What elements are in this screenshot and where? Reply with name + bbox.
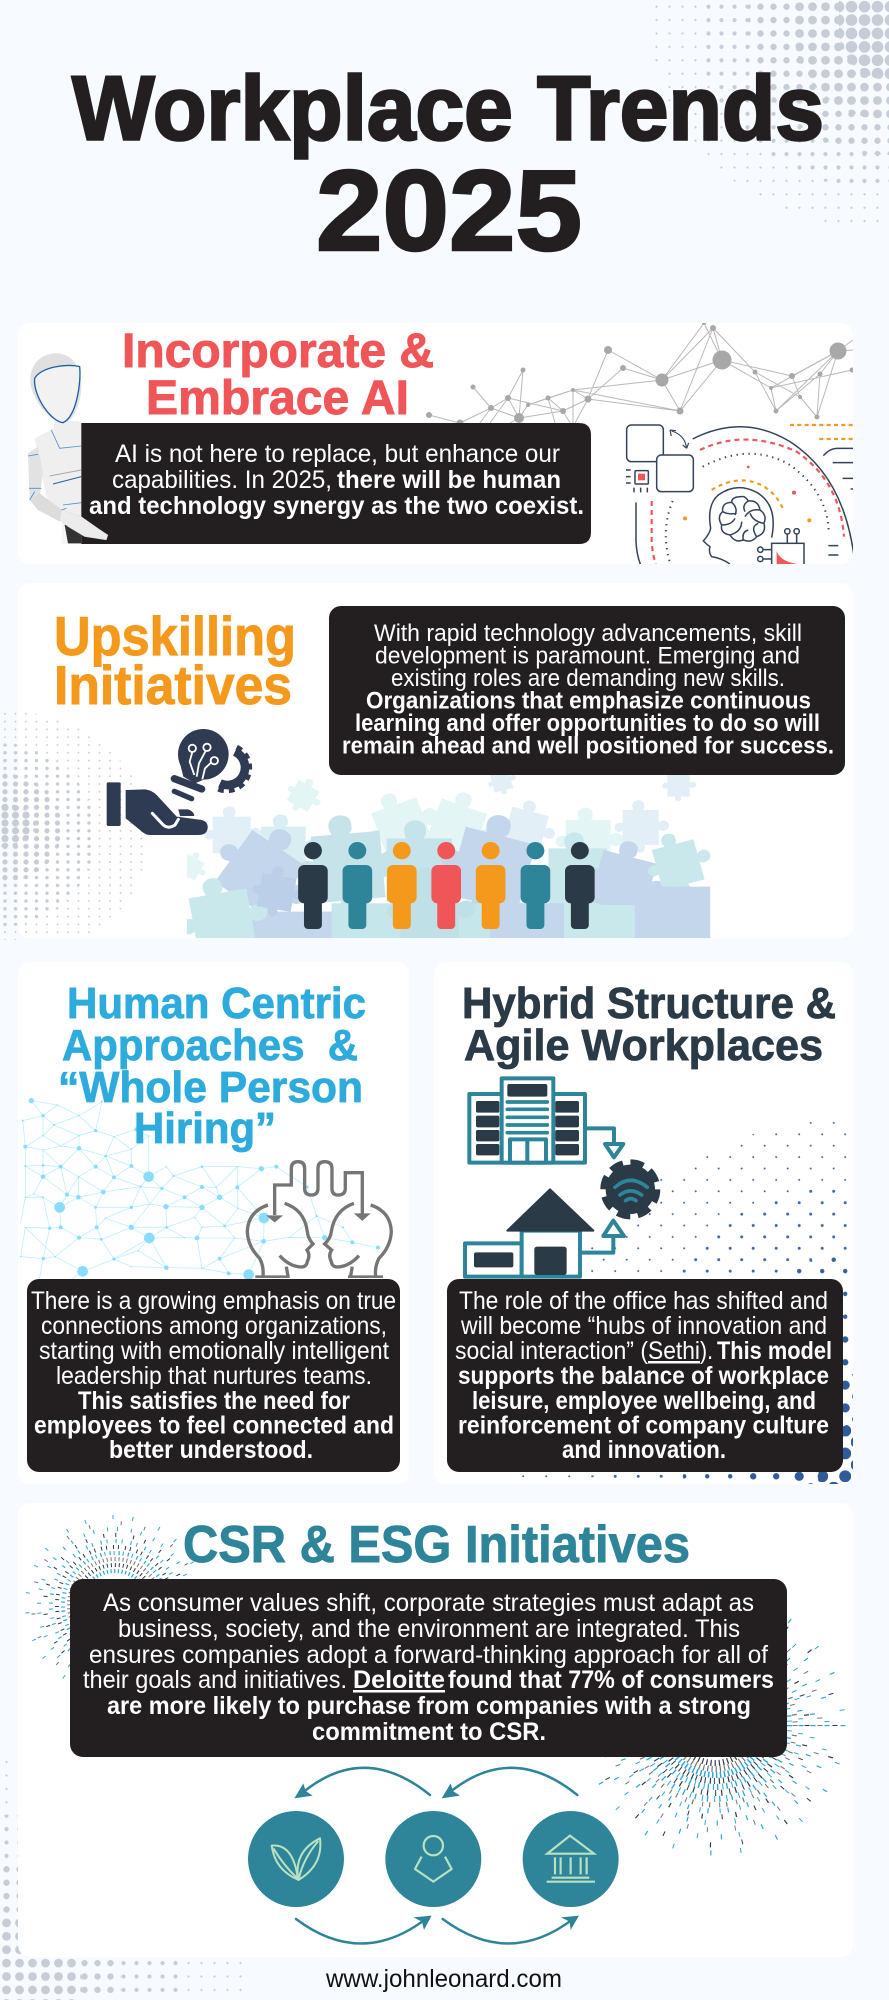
text box: upskilling: development is paramount. Emerging and: [375, 642, 800, 670]
heading: incorporate and embrace AI: [122, 325, 434, 425]
person 5: [476, 842, 505, 929]
text box: AI: there will be human: [337, 466, 561, 494]
text box: human centric: connections among organizations,: [41, 1312, 387, 1340]
text box: CSR: business, society, and the environment are integrated. This: [118, 1615, 740, 1643]
text box: hybrid: This model: [717, 1337, 832, 1365]
main title: 2025: [316, 148, 582, 275]
icon: hand holding bulb and gear: [107, 729, 249, 835]
halftone dots blue: [503, 1119, 853, 1484]
starburst left: [27, 1517, 203, 1693]
halftone dots left: [1, 712, 142, 940]
heading: human centric: “Whole Person: [58, 1063, 363, 1112]
text box: hybrid: Sethi: [648, 1337, 700, 1365]
puzzle background: [170, 764, 719, 969]
text box: CSR: ensures companies adopt a forward-thinking approach for all of: [89, 1641, 768, 1669]
text box: CSR: are more likely to purchase from companies with a strong: [107, 1692, 751, 1720]
text box: AI: and technology synergy as the two coexist.: [89, 492, 584, 520]
text box: human centric: starting with emotionally intelligent: [39, 1337, 389, 1365]
robot figure: [28, 353, 108, 544]
icon: office, home and wifi gear: [465, 1078, 657, 1277]
text box: upskilling: remain ahead and well positioned for success.: [342, 732, 834, 760]
text box: CSR: As consumer values shift, corporate strategies must adapt as: [103, 1589, 754, 1617]
wifi gear: [604, 1163, 657, 1216]
person 2: [343, 842, 372, 929]
icon: two heads connected: [247, 1162, 391, 1277]
circle: environment leaf: [248, 1811, 344, 1907]
main title: Workplace Trends: [72, 58, 824, 160]
person 3: [387, 842, 417, 929]
text box: upskilling: With rapid technology advancements, skill: [374, 620, 802, 647]
home: [465, 1221, 624, 1277]
text box: AI: capabilities. In 2025,: [112, 466, 332, 494]
text box: CSR: their goals and initiatives.: [83, 1666, 347, 1694]
panel: human centric approaches: [18, 962, 409, 1484]
panel: incorporate and embrace AI: [18, 321, 857, 570]
text box: human centric: leadership that nurtures teams.: [56, 1362, 372, 1390]
arrows: [296, 1768, 577, 1943]
starburst right: [587, 1597, 843, 1853]
person 1: [298, 842, 328, 929]
network graphic: [426, 321, 854, 426]
text box: CSR: found that 77% of consumers: [448, 1666, 774, 1694]
text box: upskilling: learning and offer opportunities to do so will: [355, 710, 820, 737]
network mesh: [20, 1098, 380, 1287]
heading: upskilling: Initiatives: [54, 654, 292, 716]
panel: CSR and ESG: [18, 1503, 853, 1957]
main title: [72, 58, 824, 275]
heading: hybrid structure: Agile Workplaces: [464, 1021, 823, 1070]
text box: AI: [81, 423, 591, 544]
website url: www.johnleonard.com: [325, 1965, 562, 1993]
heading: incorporate and embrace AI: Incorporate &: [122, 325, 434, 378]
heading: human centric: Human Centric: [67, 979, 366, 1028]
heading: human centric: Approaches &: [62, 1021, 358, 1070]
text box: hybrid: leisure, employee wellbeing, and: [472, 1387, 816, 1415]
text box: hybrid: [447, 1279, 843, 1472]
text box: hybrid: reinforcement of company culture: [458, 1412, 829, 1440]
heading: upskilling: Upskilling: [54, 605, 296, 667]
people row: [298, 842, 595, 929]
text box: hybrid: and innovation.: [562, 1436, 726, 1464]
AI brain circuit illustration: [626, 425, 857, 570]
text box: human centric: employees to feel connected and: [34, 1412, 394, 1440]
text box: hybrid: The role of the office has shifted and: [459, 1287, 828, 1315]
text box: human centric: This satisfies the need for: [78, 1387, 350, 1415]
text box: AI: AI is not here to replace, but enhance our: [115, 440, 560, 468]
text box: hybrid: ).: [700, 1337, 713, 1365]
text box: hybrid: social interaction” (: [455, 1337, 649, 1365]
text box: human centric: There is a growing emphasis on true: [31, 1287, 396, 1315]
heading: incorporate and embrace AI: Embrace AI: [146, 372, 409, 425]
text box: human centric: better understood.: [109, 1436, 313, 1464]
panel: upskilling initiatives: [1, 606, 845, 940]
text box: hybrid: will become “hubs of innovation and: [460, 1312, 827, 1340]
text box: CSR: commitment to CSR.: [312, 1718, 546, 1746]
halftone dots top right: [652, 0, 889, 230]
heading: hybrid structure: [462, 979, 836, 1070]
circle: governance bank: [523, 1811, 619, 1907]
heading: human centric: [58, 979, 366, 1153]
circle: social person: [385, 1811, 481, 1907]
text box: human centric: [27, 1279, 400, 1472]
text box: upskilling: [329, 606, 845, 775]
text box: CSR: Deloitte: [353, 1666, 445, 1694]
panel: hybrid structure: [434, 962, 853, 1484]
person 7: [565, 842, 595, 929]
person 4: [431, 842, 461, 929]
heading: human centric: Hiring”: [134, 1104, 276, 1153]
heading: hybrid structure: Hybrid Structure &: [462, 979, 836, 1028]
text box: hybrid: supports the balance of workplace: [458, 1362, 829, 1390]
text box: upskilling: existing roles are demanding new skills.: [391, 665, 785, 692]
cycle diagram: [248, 1768, 619, 1943]
text box: upskilling: Organizations that emphasize continuous: [366, 688, 811, 714]
office building: [469, 1078, 623, 1163]
halftone dots bottom left: [0, 1755, 251, 2000]
heading: upskilling: [54, 605, 296, 716]
person 6: [521, 842, 550, 929]
text box: CSR: [70, 1579, 787, 1757]
heading: CSR and ESG: CSR & ESG Initiatives: [183, 1516, 690, 1574]
